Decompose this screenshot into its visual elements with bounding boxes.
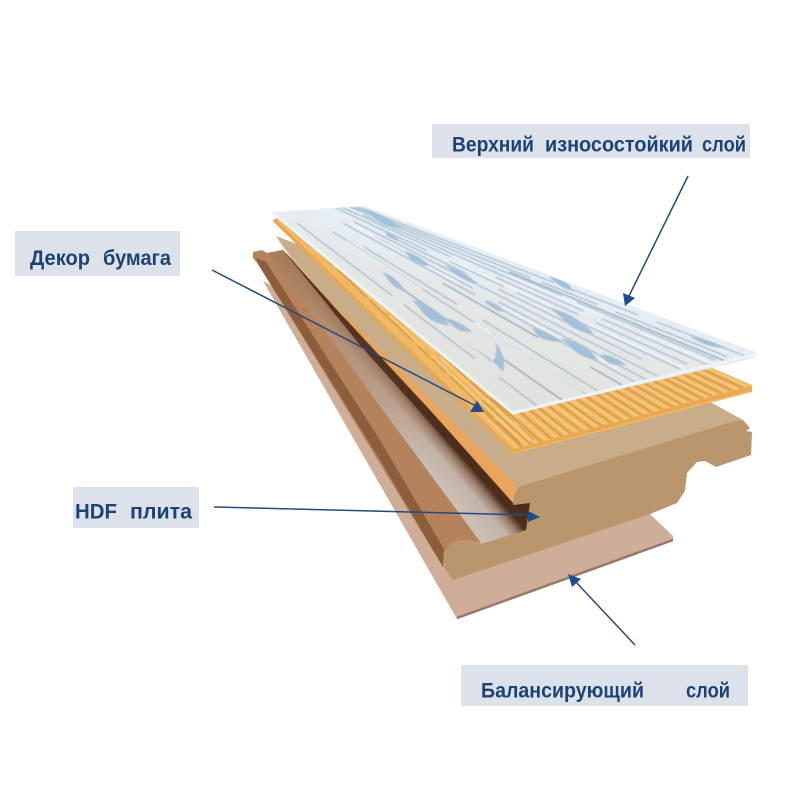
- label: top wear layer: Верхний: [452, 134, 534, 156]
- decor paper layer: [274, 214, 752, 454]
- wood grain lines: [281, 207, 745, 406]
- top surface of board: [276, 236, 743, 487]
- label: balancing layer: Балансирующий: [481, 680, 644, 702]
- label: decor paper: бумага: [103, 247, 171, 270]
- label: top wear layer: слой: [702, 134, 746, 156]
- arrow: to balancing layer: [568, 574, 635, 645]
- white highlights beside the lines: [346, 226, 710, 392]
- label: top wear layer: [432, 124, 750, 158]
- blue knots: [362, 208, 726, 372]
- balancing layer: [263, 281, 673, 619]
- label: decor paper: [15, 231, 180, 276]
- label: balancing layer: [461, 665, 748, 706]
- dark underside of tongue: [283, 250, 530, 530]
- label: HDF board: HDF: [75, 500, 117, 524]
- orange edge of board: [300, 270, 518, 503]
- label: top wear layer: износостойкий: [545, 134, 693, 156]
- label: balancing layer: слой: [686, 680, 730, 702]
- lower brown lip: [253, 250, 481, 567]
- arrow: to decor paper: [212, 270, 484, 412]
- groove floor: [267, 250, 530, 544]
- label: decor paper: Декор: [30, 247, 90, 270]
- arrow: to HDF board: [214, 507, 540, 522]
- top wear layer: [272, 205, 757, 414]
- label: HDF board: плита: [130, 500, 192, 524]
- board end profile: [443, 420, 752, 580]
- HDF board with tongue and groove: [253, 236, 752, 580]
- arrow: to top wear layer: [623, 176, 688, 306]
- label: HDF board: [73, 487, 199, 528]
